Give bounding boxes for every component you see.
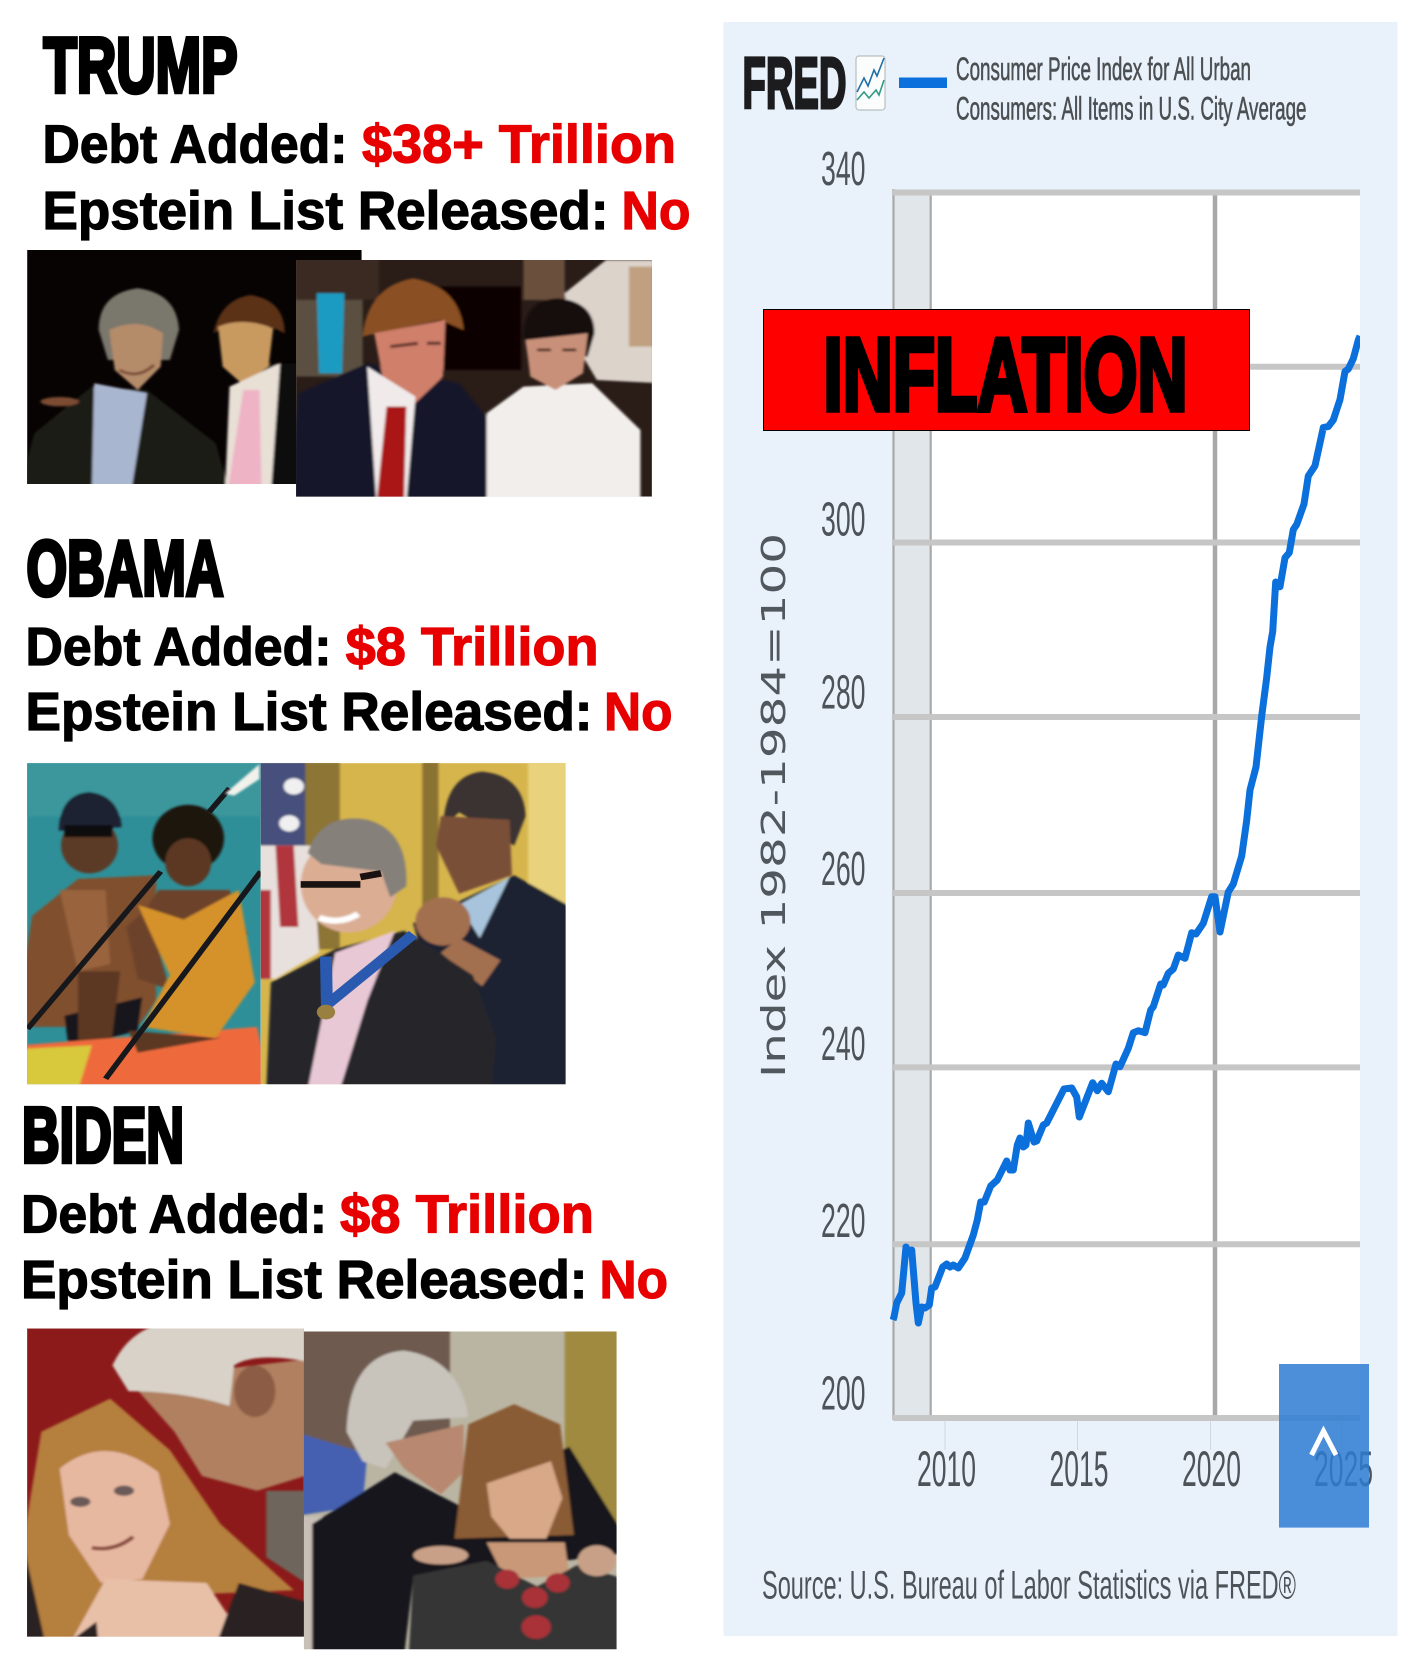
text: Biden debt added xyxy=(21,1184,594,1244)
y-axis labels: 200 xyxy=(821,1368,866,1420)
photo: man and woman seated xyxy=(289,253,661,503)
icon: up arrow xyxy=(1312,1431,1336,1455)
panel: Trump xyxy=(18,21,690,503)
y-axis labels: 280 xyxy=(821,666,866,720)
text: Obama debt added: Debt Added: xyxy=(26,617,332,677)
text: Obama Epstein list released: Epstein List Released: xyxy=(26,682,592,742)
text: Biden Epstein list released: Epstein List Released: xyxy=(21,1250,588,1310)
text: Biden Epstein list released: No xyxy=(600,1250,668,1310)
y-axis labels: 240 xyxy=(821,1018,866,1071)
panel: Obama xyxy=(18,524,672,1090)
plot area with grid xyxy=(893,189,1360,1450)
FRED logo wordmark: FRED xyxy=(742,44,846,124)
legend: series swatch xyxy=(899,78,947,88)
photo: man leaning over young woman xyxy=(27,1328,304,1637)
banner: INFLATION xyxy=(764,310,1250,432)
y-axis labels: 300 xyxy=(821,494,866,546)
text: Biden debt added: Debt Added: xyxy=(21,1184,327,1244)
text: Trump Epstein list released: Epstein List Released: xyxy=(42,181,608,241)
legend: series name xyxy=(956,51,1306,126)
text: Trump debt added: Debt Added: xyxy=(42,114,348,174)
banner: INFLATION: INFLATION xyxy=(824,317,1188,432)
text: Obama debt added xyxy=(26,617,599,677)
x-axis labels xyxy=(917,1441,1373,1497)
y-axis labels: 260 xyxy=(821,843,866,896)
y-axis title: Index 1982-1984=100 xyxy=(754,533,793,1078)
y-axis labels: 220 xyxy=(821,1195,866,1248)
y-axis labels: 340 xyxy=(821,143,866,196)
x-axis labels: 2015 xyxy=(1050,1441,1108,1497)
text: Biden debt added: $8 Trillion xyxy=(340,1184,594,1244)
heading: TRUMP: TRUMP xyxy=(44,21,238,109)
photo: couple in kayak xyxy=(18,763,271,1090)
panel: FRED inflation chart xyxy=(724,22,1398,1636)
panel: Biden xyxy=(18,1091,668,1657)
x-axis labels: 2010 xyxy=(917,1441,976,1497)
text: Obama Epstein list released: No xyxy=(604,682,672,742)
heading: OBAMA: OBAMA xyxy=(26,524,224,612)
line chart: CPI series xyxy=(893,336,1360,1323)
text: Trump Epstein list released: No xyxy=(622,181,690,241)
photo: man leaning over woman with necklace xyxy=(294,1325,624,1657)
heading: BIDEN: BIDEN xyxy=(22,1091,184,1179)
photo: two men at a party xyxy=(18,250,362,493)
text: Obama debt added: $8 Trillion xyxy=(346,617,599,677)
scroll-up button xyxy=(1279,1364,1369,1528)
x-axis labels: 2020 xyxy=(1182,1441,1241,1497)
y-axis labels xyxy=(821,143,866,1420)
text: Trump debt added: $38+ Trillion xyxy=(362,114,676,174)
text: Trump debt added xyxy=(42,114,676,174)
photo: medal ceremony xyxy=(253,757,574,1090)
icon: FRED chart logo xyxy=(856,56,885,110)
